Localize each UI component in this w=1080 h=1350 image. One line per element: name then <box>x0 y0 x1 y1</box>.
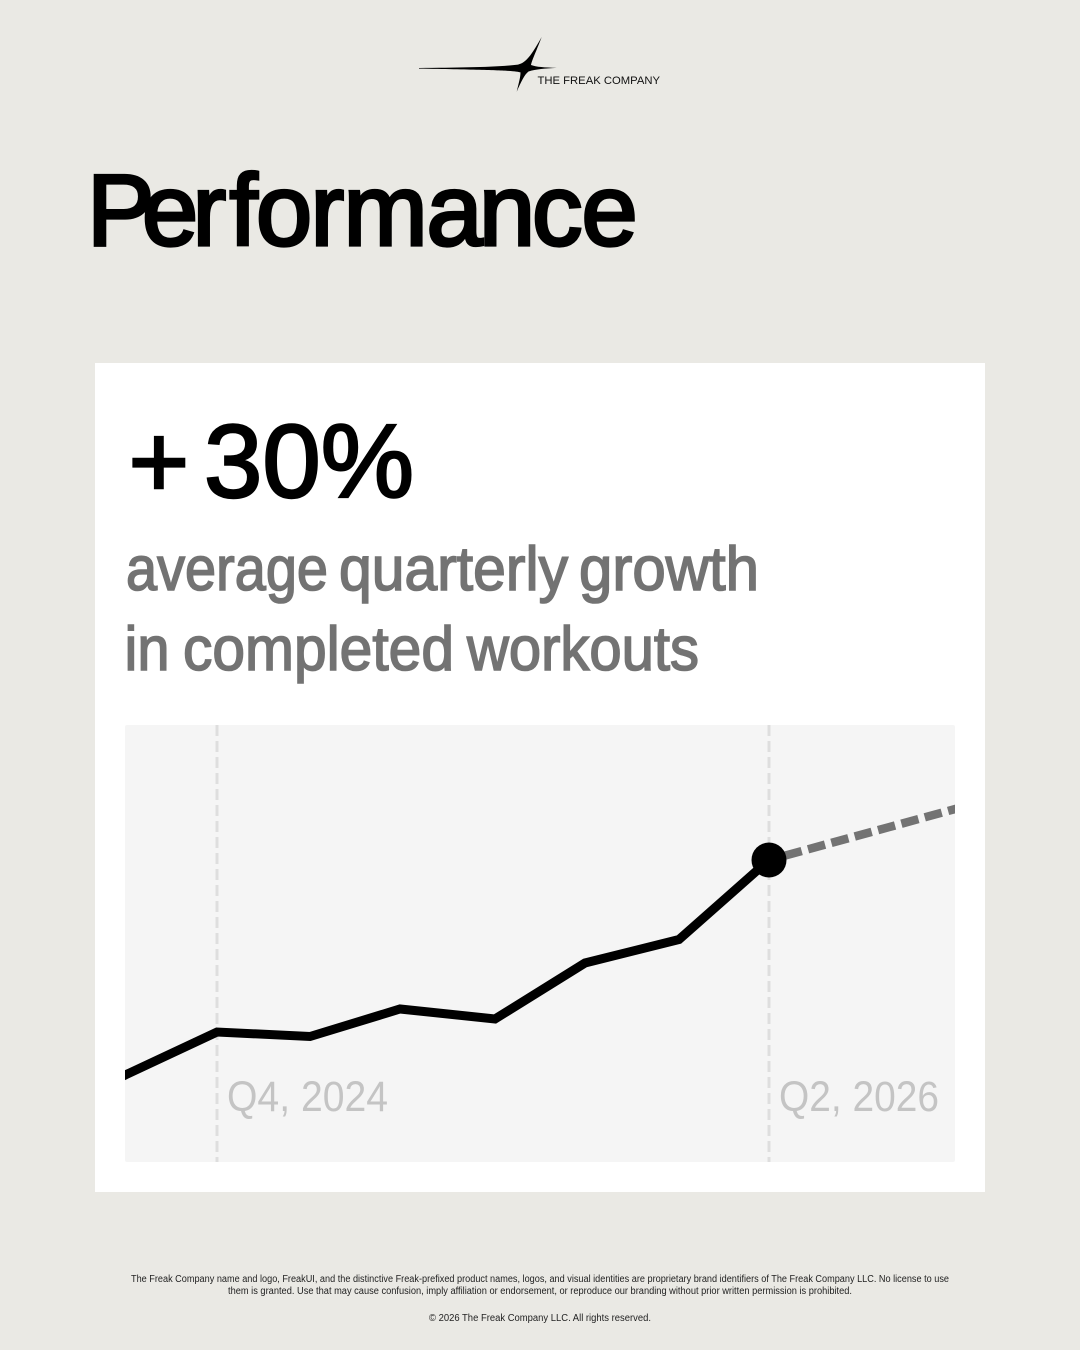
stat description: workouts <box>466 615 699 684</box>
axis label: Q2, 2026: Q2, 2026 <box>779 1073 939 1121</box>
big stat: 30% <box>204 404 414 520</box>
footer legal text <box>131 1274 949 1324</box>
logo: The Freak Company <box>419 37 661 92</box>
current point marker <box>752 842 786 878</box>
stat description: growth <box>579 535 759 604</box>
actual trend line <box>105 860 769 1084</box>
line chart <box>105 725 965 1162</box>
footer legal text: The Freak Company name and logo, FreakUI, and the distinctive Freak-prefixed product names, logos, and visual identities are proprietary brand identifiers of The Freak Company LLC. No license to use <box>131 1274 949 1285</box>
icon: four-point star <box>419 37 557 92</box>
stat description: completed <box>183 615 454 684</box>
big stat: + <box>128 404 189 520</box>
brand name: THE FREAK COMPANY <box>538 75 661 87</box>
axis label: Q4, 2024: Q4, 2024 <box>227 1073 388 1121</box>
stat description <box>124 535 759 684</box>
title: Performance <box>87 155 638 267</box>
panel: growth card <box>95 363 985 1192</box>
projected dashed line <box>784 804 955 860</box>
footer legal text: them is granted. Use that may cause confusion, imply affiliation or endorsement, or reproduce our branding without prior written permission is prohibited. <box>228 1286 852 1297</box>
stat description: average <box>126 535 328 604</box>
footer legal text: © 2026 The Freak Company LLC. All rights reserved. <box>429 1313 651 1324</box>
stat description: in <box>124 615 170 684</box>
stat description: quarterly <box>339 535 568 604</box>
